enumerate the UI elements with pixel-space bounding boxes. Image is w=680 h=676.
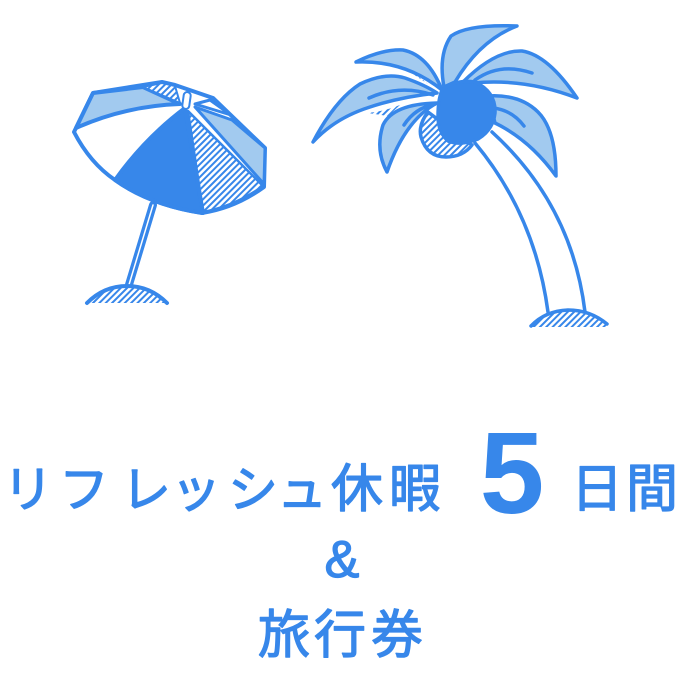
hatched coconut xyxy=(420,112,472,157)
title: refresh leave 5 days: リ xyxy=(3,462,53,518)
umbrella canopy xyxy=(74,82,265,213)
solid coconut xyxy=(438,81,495,143)
subtitle: travel voucher xyxy=(258,607,423,665)
palm leaf veins xyxy=(369,69,532,126)
icon: palm tree xyxy=(313,26,607,327)
title: refresh leave 5 days: 5 xyxy=(480,408,544,538)
title: refresh leave 5 days: フ xyxy=(59,462,109,518)
palm sand mound xyxy=(531,310,607,327)
title: refresh leave 5 days: 休 xyxy=(331,461,383,519)
ampersand: & xyxy=(325,531,359,589)
title: refresh leave 5 days: ュ xyxy=(277,462,327,518)
title: refresh leave 5 days: 間 xyxy=(626,461,678,519)
icon: beach umbrella xyxy=(74,82,265,303)
title: refresh leave 5 days: 暇 xyxy=(389,461,441,519)
subtitle: travel voucher: 旅 xyxy=(258,607,310,665)
palm leaves xyxy=(313,26,577,176)
title: refresh leave 5 days: レ xyxy=(121,462,171,518)
title: refresh leave 5 days: ッ xyxy=(171,462,221,518)
title: refresh leave 5 days: 日 xyxy=(571,461,623,519)
subtitle: travel voucher: 券 xyxy=(371,607,423,665)
palm trunk xyxy=(475,132,585,312)
subtitle: travel voucher: 行 xyxy=(314,607,366,665)
umbrella pole xyxy=(128,205,153,288)
umbrella sand mound xyxy=(87,286,167,303)
title: refresh leave 5 days xyxy=(3,408,678,538)
leaf hatch shadows xyxy=(368,63,428,116)
title: refresh leave 5 days: シ xyxy=(228,462,278,518)
